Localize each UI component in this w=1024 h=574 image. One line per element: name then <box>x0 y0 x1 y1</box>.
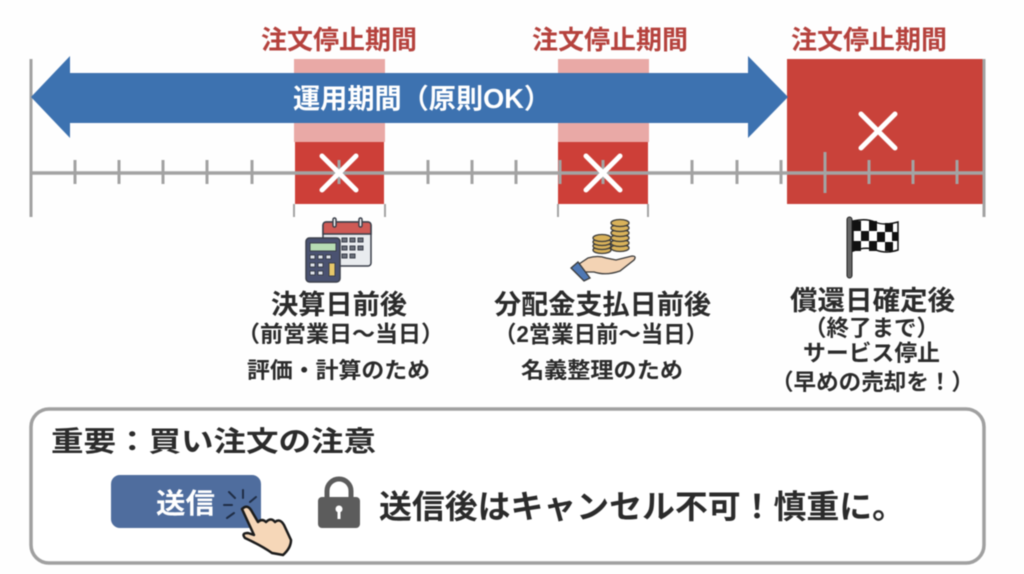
operating period double arrow <box>31 56 788 138</box>
stop band 3 <box>787 59 983 204</box>
send button <box>111 475 261 528</box>
panel: buy order warning <box>31 409 984 563</box>
stop period heading 2: 注文停止期間 <box>532 25 688 55</box>
timeline axis <box>31 59 984 217</box>
stop period heading 3: 注文停止期間 <box>791 25 947 55</box>
period: distribution date: （2営業日前〜当日） <box>494 321 708 347</box>
arrow label: 運用期間（原則OK） <box>293 83 551 114</box>
stop band 1 <box>294 59 385 204</box>
icon: calculator and calendar <box>306 218 371 282</box>
icon: checkered flag <box>847 217 898 278</box>
period: redemption date: （終了まで） <box>804 316 939 341</box>
panel heading: 重要：買い注文の注意 <box>51 426 376 457</box>
icon: click spark <box>224 490 256 518</box>
heading: closing date: 決算日前後 <box>271 290 407 320</box>
heading: redemption date: 償還日確定後 <box>790 286 955 316</box>
warning message: 送信後はキャンセル不可！慎重に。 <box>379 489 905 525</box>
icon: padlock <box>318 479 360 528</box>
send button: 送信 <box>156 488 215 519</box>
period: closing date: （前営業日〜当日） <box>237 322 444 347</box>
heading: distribution date: 分配金支払日前後 <box>494 290 711 320</box>
reason: closing date: 評価・計算のため <box>247 358 430 383</box>
icon: hand with coins <box>571 220 635 281</box>
cross mark 2 <box>586 156 620 190</box>
cross mark 3 <box>861 114 895 148</box>
reason: distribution date: 名義整理のため <box>521 358 683 383</box>
cross mark 1 <box>322 156 356 190</box>
stop period heading 1: 注文停止期間 <box>261 25 417 55</box>
icon: pointing hand <box>242 507 291 555</box>
note: sell early: （早めの売却を！） <box>771 370 974 395</box>
stop band 2 <box>558 59 649 204</box>
note: service stop: サービス停止 <box>803 341 940 366</box>
